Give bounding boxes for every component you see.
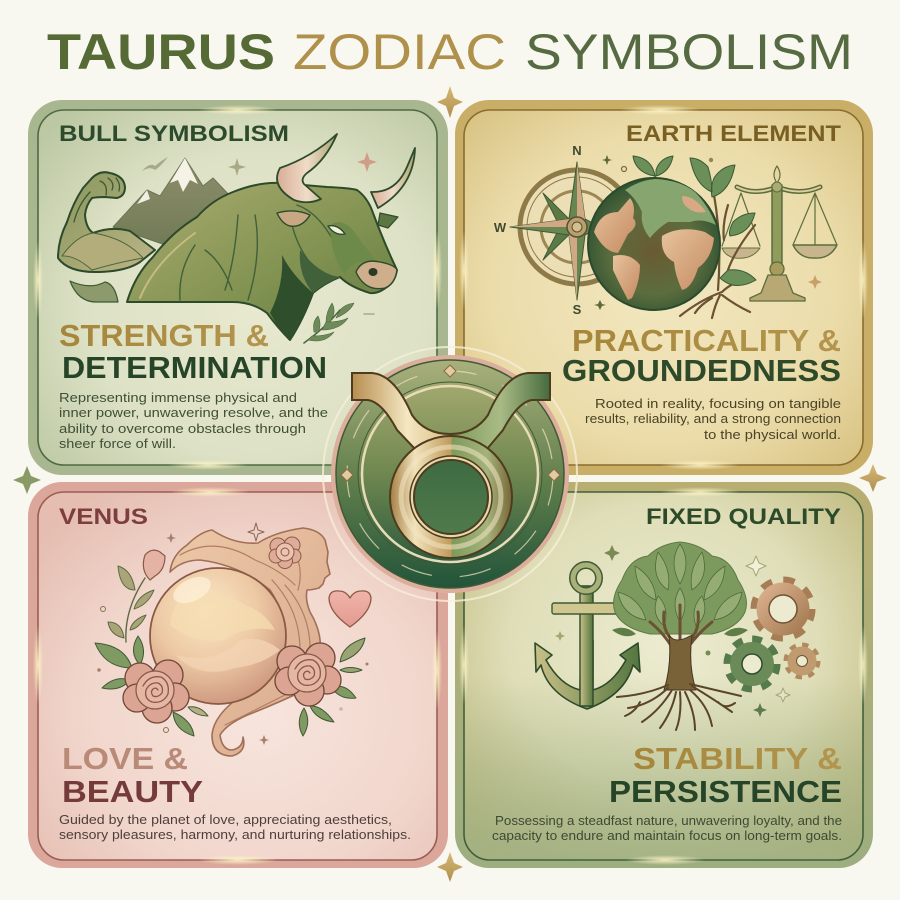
body text: ability to overcome obstacles through xyxy=(59,421,306,436)
centre medallion: Taurus symbol xyxy=(323,347,577,601)
heading: earth element: EARTH ELEMENT xyxy=(626,121,841,146)
icon: rose bud with stem xyxy=(108,550,165,642)
body text: sheer force of will. xyxy=(59,436,176,451)
decorative star: top xyxy=(437,86,463,118)
icon: globe xyxy=(588,178,720,310)
body text xyxy=(59,812,411,842)
zodiac glyph: ring xyxy=(389,435,513,559)
bull chest shading xyxy=(270,255,313,340)
zodiac glyph: horns xyxy=(352,373,550,449)
heading: beauty: BEAUTY xyxy=(62,774,203,809)
body text: sensory pleasures, harmony, and nurturing relationships. xyxy=(59,827,411,842)
decorative star: bottom xyxy=(437,852,463,882)
illustration: venus planet with roses xyxy=(95,523,371,756)
body text: capacity to endure and maintain focus on long-term goals. xyxy=(492,828,842,843)
icon: far ear xyxy=(378,213,398,228)
heading: venus: VENUS xyxy=(59,504,148,529)
title: TAURUS xyxy=(47,24,275,80)
icon: leaf sprig xyxy=(304,303,354,343)
panel: venus xyxy=(28,482,448,868)
icon: eye xyxy=(328,226,345,234)
heading: bull symbolism: BULL SYMBOLISM xyxy=(59,121,289,146)
sparkles xyxy=(555,545,790,717)
medallion diamonds xyxy=(341,365,560,481)
heading: love: LOVE & xyxy=(62,741,188,776)
icon: bull body xyxy=(127,183,397,340)
decorative star: right xyxy=(859,464,887,492)
icon: branch and roots xyxy=(633,156,756,318)
icon: heart xyxy=(329,591,371,627)
bull muscle lines xyxy=(180,205,343,300)
heading: fixed quality: FIXED QUALITY xyxy=(646,504,841,529)
icon: mountain xyxy=(113,158,232,250)
icon: near ear xyxy=(277,211,310,226)
body text xyxy=(492,813,842,843)
bull head shading xyxy=(330,222,376,275)
panel: earth element xyxy=(455,100,873,475)
body text: Rooted in reality, focusing on tangible xyxy=(595,396,841,411)
icon: compass: N xyxy=(572,143,582,158)
icon: back horn xyxy=(371,148,415,208)
dash xyxy=(364,313,374,315)
heading: groundedness: GROUNDEDNESS xyxy=(562,353,841,388)
icon: compass: S xyxy=(573,302,582,317)
tree roots xyxy=(617,684,741,730)
icon: muzzle xyxy=(356,261,397,289)
body text: to the physical world. xyxy=(704,427,841,442)
icon: right rose xyxy=(275,643,341,706)
sparkles xyxy=(97,523,368,745)
icon: green gear xyxy=(728,640,776,688)
panel: bull symbolism xyxy=(28,100,448,475)
tree branches and trunk xyxy=(650,605,712,665)
body text: Guided by the planet of love, appreciating aesthetics, xyxy=(59,812,392,827)
body text: inner power, unwavering resolve, and the xyxy=(59,405,328,420)
body text: Possessing a steadfast nature, unwavering loyalty, and the xyxy=(495,813,842,828)
icon: tree xyxy=(612,542,748,730)
icon: sparkle xyxy=(228,158,246,176)
heading: determination: DETERMINATION xyxy=(62,350,327,385)
title: SYMBOLISM xyxy=(525,24,853,80)
icon: large copper gear xyxy=(755,581,811,637)
icon: bird xyxy=(142,157,168,171)
icon: front horn xyxy=(277,134,337,202)
tree crown xyxy=(614,542,746,634)
icon: pink sparkle xyxy=(357,152,377,172)
icon: anchor xyxy=(535,565,640,709)
illustration: compass, globe and scales xyxy=(494,143,837,318)
heading: stability: STABILITY & xyxy=(633,741,842,776)
heading: strength: STRENGTH & xyxy=(59,318,269,353)
icon: flowing hair and profile xyxy=(170,528,330,756)
icon: compass xyxy=(494,143,634,317)
icon: nostril xyxy=(368,268,378,276)
icon: compass: W xyxy=(494,220,507,235)
icon: hair rose xyxy=(269,537,301,568)
icon: bull tail xyxy=(70,281,118,302)
decorative star: left xyxy=(13,466,41,494)
body text xyxy=(585,396,841,442)
body text: Representing immense physical and xyxy=(59,390,297,405)
illustration: anchor, tree and gears xyxy=(535,542,818,730)
body text: results, reliability, and a strong connection xyxy=(585,411,841,426)
illustration: flexing bull with mountain xyxy=(58,134,415,343)
title xyxy=(47,24,853,80)
icon: green leaves xyxy=(95,636,365,736)
icon: left rose xyxy=(123,660,189,723)
heading: persistence: PERSISTENCE xyxy=(609,774,842,809)
icon: small copper gear xyxy=(786,645,818,677)
icon: flexed arm xyxy=(58,172,155,272)
panel: fixed quality xyxy=(455,482,873,868)
icon: balance scales xyxy=(722,166,837,301)
body text xyxy=(59,390,328,451)
title: ZODIAC xyxy=(293,24,506,80)
heading: practicality: PRACTICALITY & xyxy=(572,323,841,358)
sparkles xyxy=(594,155,822,310)
icon: venus planet xyxy=(150,568,286,704)
